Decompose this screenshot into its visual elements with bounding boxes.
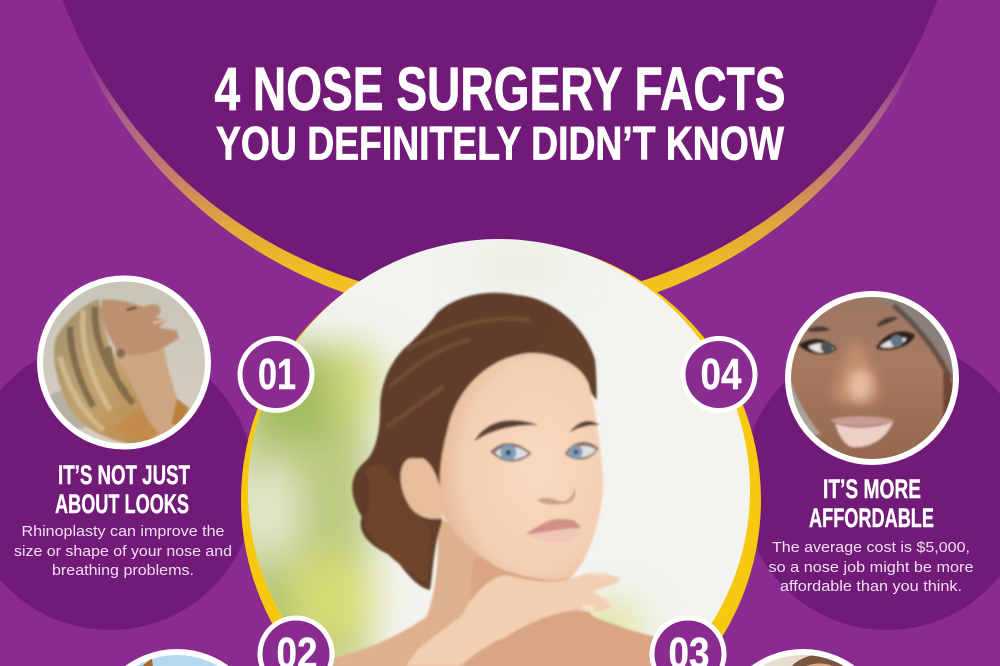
text: fact 1 body bbox=[14, 524, 232, 579]
photo: dark-skinned woman, close-up bbox=[785, 290, 960, 465]
badge 03 bbox=[652, 618, 724, 666]
photo: fact 2 woman, cropped bbox=[126, 649, 228, 666]
text: fact 4 body bbox=[768, 540, 974, 595]
text: fact 1 body: Rhinoplasty can improve the bbox=[22, 524, 224, 540]
eyebrows bbox=[474, 420, 538, 442]
lips bbox=[830, 416, 894, 426]
text: fact 4 body: The average cost is $5,000, bbox=[772, 540, 970, 556]
text: fact 4 heading bbox=[809, 474, 934, 533]
title: YOU DEFINITELY DIDN’T KNOW bbox=[216, 116, 784, 170]
title bbox=[214, 55, 786, 170]
text: fact 1 heading bbox=[55, 460, 190, 519]
text: fact 1 heading: IT’S NOT JUST bbox=[58, 460, 190, 490]
photo: woman looking up bbox=[37, 276, 211, 450]
header semicircle with gold crescent bbox=[33, 0, 967, 320]
badge 01 bbox=[240, 338, 312, 410]
nose bbox=[832, 343, 879, 405]
text: fact 4 body: so a nose job might be more bbox=[768, 560, 974, 576]
face bbox=[440, 353, 603, 580]
text: fact 1 body: breathing problems. bbox=[52, 563, 194, 579]
text: fact 1 body: size or shape of your nose and bbox=[14, 544, 232, 560]
eyes bbox=[798, 339, 837, 354]
lips bbox=[525, 519, 581, 534]
hair strands bbox=[876, 297, 953, 375]
shirt bbox=[172, 398, 189, 427]
neck and shoulders bbox=[332, 518, 485, 666]
neck bbox=[113, 337, 187, 447]
panel: fact 4 backdrop bbox=[742, 340, 1000, 630]
hair bbox=[352, 293, 597, 590]
badge 04 bbox=[683, 338, 755, 410]
nose shadow bbox=[537, 487, 575, 505]
text: fact 4 heading: IT’S MORE bbox=[823, 474, 921, 504]
hair bbox=[54, 299, 157, 444]
eyes bbox=[490, 443, 532, 462]
text: fact 1 heading: ABOUT LOOKS bbox=[55, 489, 189, 519]
face bbox=[101, 300, 179, 355]
badge 04: 04 bbox=[700, 350, 742, 399]
panel: fact 1 backdrop bbox=[0, 340, 255, 630]
badge 02 bbox=[260, 618, 332, 666]
brows bbox=[808, 326, 831, 332]
ear bbox=[401, 458, 442, 519]
badge 01: 01 bbox=[258, 350, 296, 399]
hand bbox=[407, 573, 620, 666]
gold ring behind main photo bbox=[241, 240, 761, 666]
main photo: woman resting chin on hand bbox=[235, 230, 760, 666]
text: fact 4 body: affordable than you think. bbox=[780, 579, 962, 595]
photo: fact 3 woman, cropped bbox=[752, 649, 854, 666]
text: fact 4 heading: AFFORDABLE bbox=[809, 503, 934, 533]
title: 4 NOSE SURGERY FACTS bbox=[214, 55, 786, 123]
